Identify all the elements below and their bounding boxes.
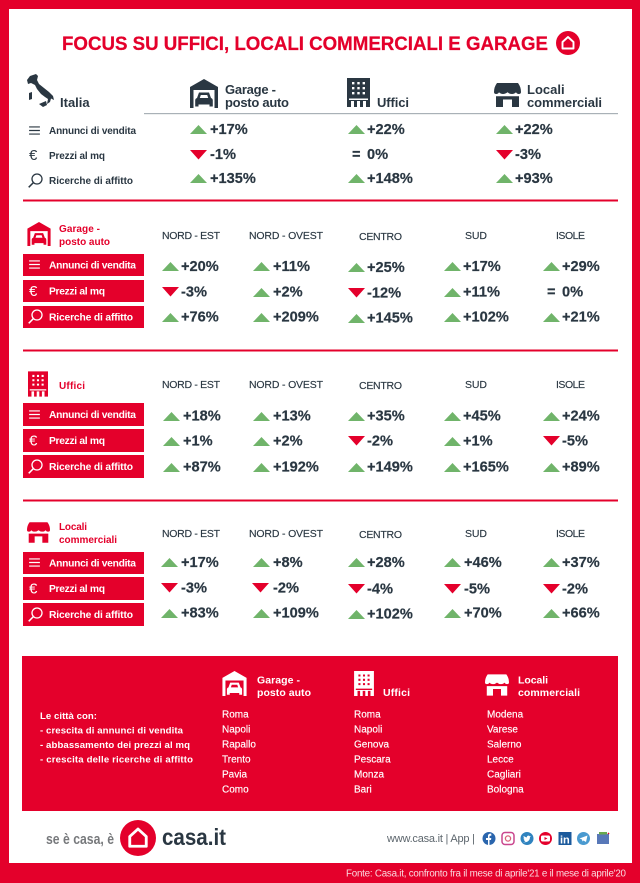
row label: prezzi al mq: € xyxy=(29,432,38,450)
values: ricerche di affitto: +70% xyxy=(464,606,502,622)
row: annunci di vendita xyxy=(29,122,553,138)
values: prezzi al mq: -2% xyxy=(367,434,393,450)
column: locali cities: Lecce xyxy=(487,754,514,766)
column header: uffici xyxy=(347,78,409,110)
row label: prezzi al mq xyxy=(23,577,144,600)
column: locali cities: Salerno xyxy=(487,740,522,750)
column: uffici cities: Monza xyxy=(354,770,384,780)
column header: garage: posto auto xyxy=(225,95,289,110)
row label: prezzi al mq xyxy=(23,280,144,302)
row label: annunci di vendita: Annunci di vendita xyxy=(49,558,136,570)
values: annunci di vendita xyxy=(161,555,600,571)
row: annunci di vendita: +22% xyxy=(367,122,405,138)
values: prezzi al mq: +2% xyxy=(273,434,303,450)
column: uffici cities: Pescara xyxy=(354,754,391,766)
values: ricerche di affitto: +21% xyxy=(562,310,600,326)
section heading: uffici xyxy=(28,371,85,397)
row label: annunci di vendita xyxy=(23,254,144,276)
icon: youtube xyxy=(539,832,552,845)
column: garage cities: Napoli xyxy=(222,724,250,736)
section heading: uffici: Uffici xyxy=(59,381,85,392)
section heading: garage: posto auto xyxy=(59,237,110,248)
row label: prezzi al mq: € xyxy=(29,580,38,598)
values: prezzi al mq: +2% xyxy=(273,284,303,300)
values: annunci di vendita: +8% xyxy=(273,555,303,571)
column header: garage: Garage - xyxy=(225,82,276,97)
area headers: SUD xyxy=(465,379,487,391)
values: ricerche di affitto: +102% xyxy=(463,310,509,326)
row label: ricerche di affitto xyxy=(23,603,144,626)
title: FOCUS SU UFFICI, LOCALI COMMERCIALI E GARAGE xyxy=(62,34,548,55)
icon: map of Italy xyxy=(27,74,54,107)
source note: Fonte: Casa.it, confronto fra il mese di aprile'21 e il mese di aprile'20 xyxy=(346,868,627,880)
panel: garage by area xyxy=(23,222,600,328)
row: prezzi al mq: 0% xyxy=(367,147,388,163)
values: annunci di vendita: +45% xyxy=(463,408,501,424)
values: annunci di vendita: +28% xyxy=(367,555,405,571)
icon: app store xyxy=(597,832,609,844)
values: prezzi al mq: +11% xyxy=(463,284,500,300)
column header: locali commerciali: Locali xyxy=(527,82,565,97)
column: garage cities: Roma xyxy=(222,710,249,720)
values: annunci di vendita: +46% xyxy=(464,555,502,571)
row label: prezzi al mq: € xyxy=(29,283,38,300)
values: prezzi al mq xyxy=(163,434,588,450)
values: prezzi al mq: = xyxy=(547,284,556,300)
column: garage cities: Trento xyxy=(222,754,251,766)
section heading: locali commerciali: commerciali xyxy=(59,535,117,546)
section heading: locali commerciali: Locali xyxy=(59,522,87,533)
values: ricerche di affitto: +89% xyxy=(562,460,600,476)
icon: facebook xyxy=(482,832,496,845)
icon: linkedin: in xyxy=(560,834,570,846)
column: uffici cities xyxy=(354,671,410,796)
row label: prezzi al mq: Prezzi al mq xyxy=(49,286,105,298)
row label: ricerche di affitto xyxy=(23,306,144,328)
values: prezzi al mq: -4% xyxy=(367,582,393,598)
row label: prezzi al mq: Prezzi al mq xyxy=(49,584,105,595)
column: locali cities: Locali xyxy=(518,674,548,686)
row label: ricerche di affitto: Ricerche di affitto xyxy=(49,312,133,324)
row: prezzi al mq: -1% xyxy=(210,147,236,163)
values: annunci di vendita: +17% xyxy=(463,259,501,275)
values: prezzi al mq xyxy=(162,284,583,302)
area headers: NORD - OVEST xyxy=(249,528,324,540)
column: locali cities: Cagliari xyxy=(487,770,521,780)
heading: Italia: Italia xyxy=(60,95,90,110)
values: ricerche di affitto: +145% xyxy=(367,310,413,326)
section heading: garage: Garage - xyxy=(59,224,100,235)
text block: le città con: - abbassamento dei prezzi al mq xyxy=(40,740,190,751)
area headers: ISOLE xyxy=(556,379,585,391)
values: annunci di vendita: +18% xyxy=(183,408,221,424)
column: uffici cities: Napoli xyxy=(354,724,382,736)
panel: top cities xyxy=(22,656,618,811)
row label: annunci di vendita xyxy=(23,552,144,574)
row: ricerche di affitto: +148% xyxy=(367,171,413,187)
row: ricerche di affitto: Ricerche di affitto xyxy=(49,176,133,187)
row label: prezzi al mq: Prezzi al mq xyxy=(49,436,105,447)
text block: le città con: - crescita delle ricerche di affitto xyxy=(40,754,193,766)
column: locali cities: Varese xyxy=(487,724,518,736)
column: uffici cities: Uffici xyxy=(383,687,410,699)
area headers: NORD - EST xyxy=(162,230,221,242)
area headers: SUD xyxy=(465,230,487,242)
icon: twitter xyxy=(520,832,534,845)
values: prezzi al mq: -2% xyxy=(273,580,299,596)
area headers xyxy=(162,230,585,243)
values: ricerche di affitto: +76% xyxy=(181,310,219,326)
values: prezzi al mq: -3% xyxy=(181,580,207,596)
values: ricerche di affitto xyxy=(161,606,600,622)
row: prezzi al mq xyxy=(29,147,541,164)
values: ricerche di affitto: +149% xyxy=(367,460,413,476)
section heading: locali commerciali xyxy=(27,522,117,546)
values: annunci di vendita xyxy=(162,259,600,276)
text block: le città con xyxy=(40,711,193,766)
values: annunci di vendita: +17% xyxy=(181,555,219,571)
row: prezzi al mq: € xyxy=(29,147,38,164)
values: prezzi al mq: 0% xyxy=(562,284,583,300)
column header: locali commerciali xyxy=(494,82,602,110)
column header: garage xyxy=(190,79,289,110)
website links: www.casa.it | App | xyxy=(386,833,475,845)
column: locali cities: Modena xyxy=(487,710,524,720)
values: ricerche di affitto: +192% xyxy=(273,460,319,476)
values: annunci di vendita: +24% xyxy=(562,408,600,424)
values: ricerche di affitto: +109% xyxy=(273,606,319,622)
text block: le città con: - crescita di annunci di vendita xyxy=(40,726,184,736)
area headers: NORD - OVEST xyxy=(249,230,324,242)
area headers xyxy=(162,528,585,541)
area headers: CENTRO xyxy=(359,380,402,392)
column: uffici cities: Roma xyxy=(354,710,381,720)
values: annunci di vendita: +25% xyxy=(367,260,405,276)
row label: ricerche di affitto: Ricerche di affitto xyxy=(49,462,133,473)
values: prezzi al mq: +1% xyxy=(463,434,493,450)
logo: se è casa, è casa.it: casa.it xyxy=(162,824,226,850)
values: annunci di vendita: +37% xyxy=(562,555,600,571)
column: garage cities: Garage - xyxy=(257,674,300,686)
column: garage cities: posto auto xyxy=(257,687,311,699)
values: ricerche di affitto: +165% xyxy=(463,460,509,476)
values: annunci di vendita: +29% xyxy=(562,259,600,275)
column: uffici cities: Bari xyxy=(354,784,372,796)
area headers: SUD xyxy=(465,528,487,540)
icon: instagram xyxy=(502,832,514,844)
values: prezzi al mq: -5% xyxy=(464,582,490,598)
values: prezzi al mq: -12% xyxy=(367,286,401,302)
row: annunci di vendita: +22% xyxy=(515,122,553,138)
row: prezzi al mq: = xyxy=(352,147,361,163)
column: garage cities: Rapallo xyxy=(222,740,256,750)
row: annunci di vendita: Annunci di vendita xyxy=(49,126,136,137)
values: annunci di vendita: +20% xyxy=(181,259,219,275)
area headers: NORD - EST xyxy=(162,379,221,391)
row label: ricerche di affitto: Ricerche di affitto xyxy=(49,610,133,621)
column header: uffici: Uffici xyxy=(377,95,409,110)
area headers: NORD - EST xyxy=(162,528,221,540)
values: ricerche di affitto: +83% xyxy=(181,606,219,622)
values: annunci di vendita: +35% xyxy=(367,408,405,424)
panel: locali commerciali by area xyxy=(23,522,600,626)
row label: annunci di vendita xyxy=(23,403,144,426)
row: ricerche di affitto: +93% xyxy=(515,171,553,187)
values: annunci di vendita xyxy=(163,408,600,424)
row label: ricerche di affitto xyxy=(23,455,144,478)
row: ricerche di affitto xyxy=(29,171,553,187)
icon: telegram xyxy=(577,832,590,845)
column: locali cities: commerciali xyxy=(518,687,580,699)
panel: uffici by area xyxy=(23,371,600,478)
values: prezzi al mq: -5% xyxy=(562,434,588,450)
row: annunci di vendita: +17% xyxy=(210,122,248,138)
area headers xyxy=(162,379,585,392)
values: ricerche di affitto xyxy=(162,310,600,326)
column: garage cities: Como xyxy=(222,784,249,796)
row label: prezzi al mq xyxy=(23,429,144,452)
logo: se è casa, è casa.it xyxy=(46,820,226,856)
row label: annunci di vendita: Annunci di vendita xyxy=(49,410,136,421)
column: garage cities xyxy=(222,671,311,796)
values: annunci di vendita: +11% xyxy=(273,259,310,275)
values: ricerche di affitto: +102% xyxy=(367,606,413,622)
area headers: CENTRO xyxy=(359,231,402,243)
values: prezzi al mq: +1% xyxy=(183,434,213,450)
values: prezzi al mq xyxy=(161,580,588,598)
text block: le città con: Le città con: xyxy=(40,711,97,722)
social icons xyxy=(482,832,609,846)
area headers: CENTRO xyxy=(359,529,402,541)
section heading: garage xyxy=(27,222,110,248)
column: locali cities: Bologna xyxy=(487,784,524,796)
row: prezzi al mq: Prezzi al mq xyxy=(49,151,105,162)
values: ricerche di affitto: +209% xyxy=(273,310,319,326)
column: uffici cities: Genova xyxy=(354,740,389,750)
column: locali cities xyxy=(485,674,580,796)
logo: se è casa, è casa.it: se è casa, è xyxy=(46,832,114,848)
column header: locali commerciali: commerciali xyxy=(527,95,602,110)
area headers: ISOLE xyxy=(556,230,585,242)
column: garage cities: Pavia xyxy=(222,770,247,780)
values: ricerche di affitto: +66% xyxy=(562,606,600,622)
values: prezzi al mq: -3% xyxy=(181,284,207,300)
panel: Italia summary table xyxy=(27,74,618,187)
area headers: ISOLE xyxy=(556,528,585,540)
values: annunci di vendita: +13% xyxy=(273,408,311,424)
row label: annunci di vendita: Annunci di vendita xyxy=(49,260,136,272)
row: ricerche di affitto: +135% xyxy=(210,171,256,187)
values: prezzi al mq: -2% xyxy=(562,582,588,598)
row: prezzi al mq: -3% xyxy=(515,147,541,163)
values: ricerche di affitto xyxy=(163,460,600,476)
values: ricerche di affitto: +87% xyxy=(183,460,221,476)
area headers: NORD - OVEST xyxy=(249,379,324,391)
